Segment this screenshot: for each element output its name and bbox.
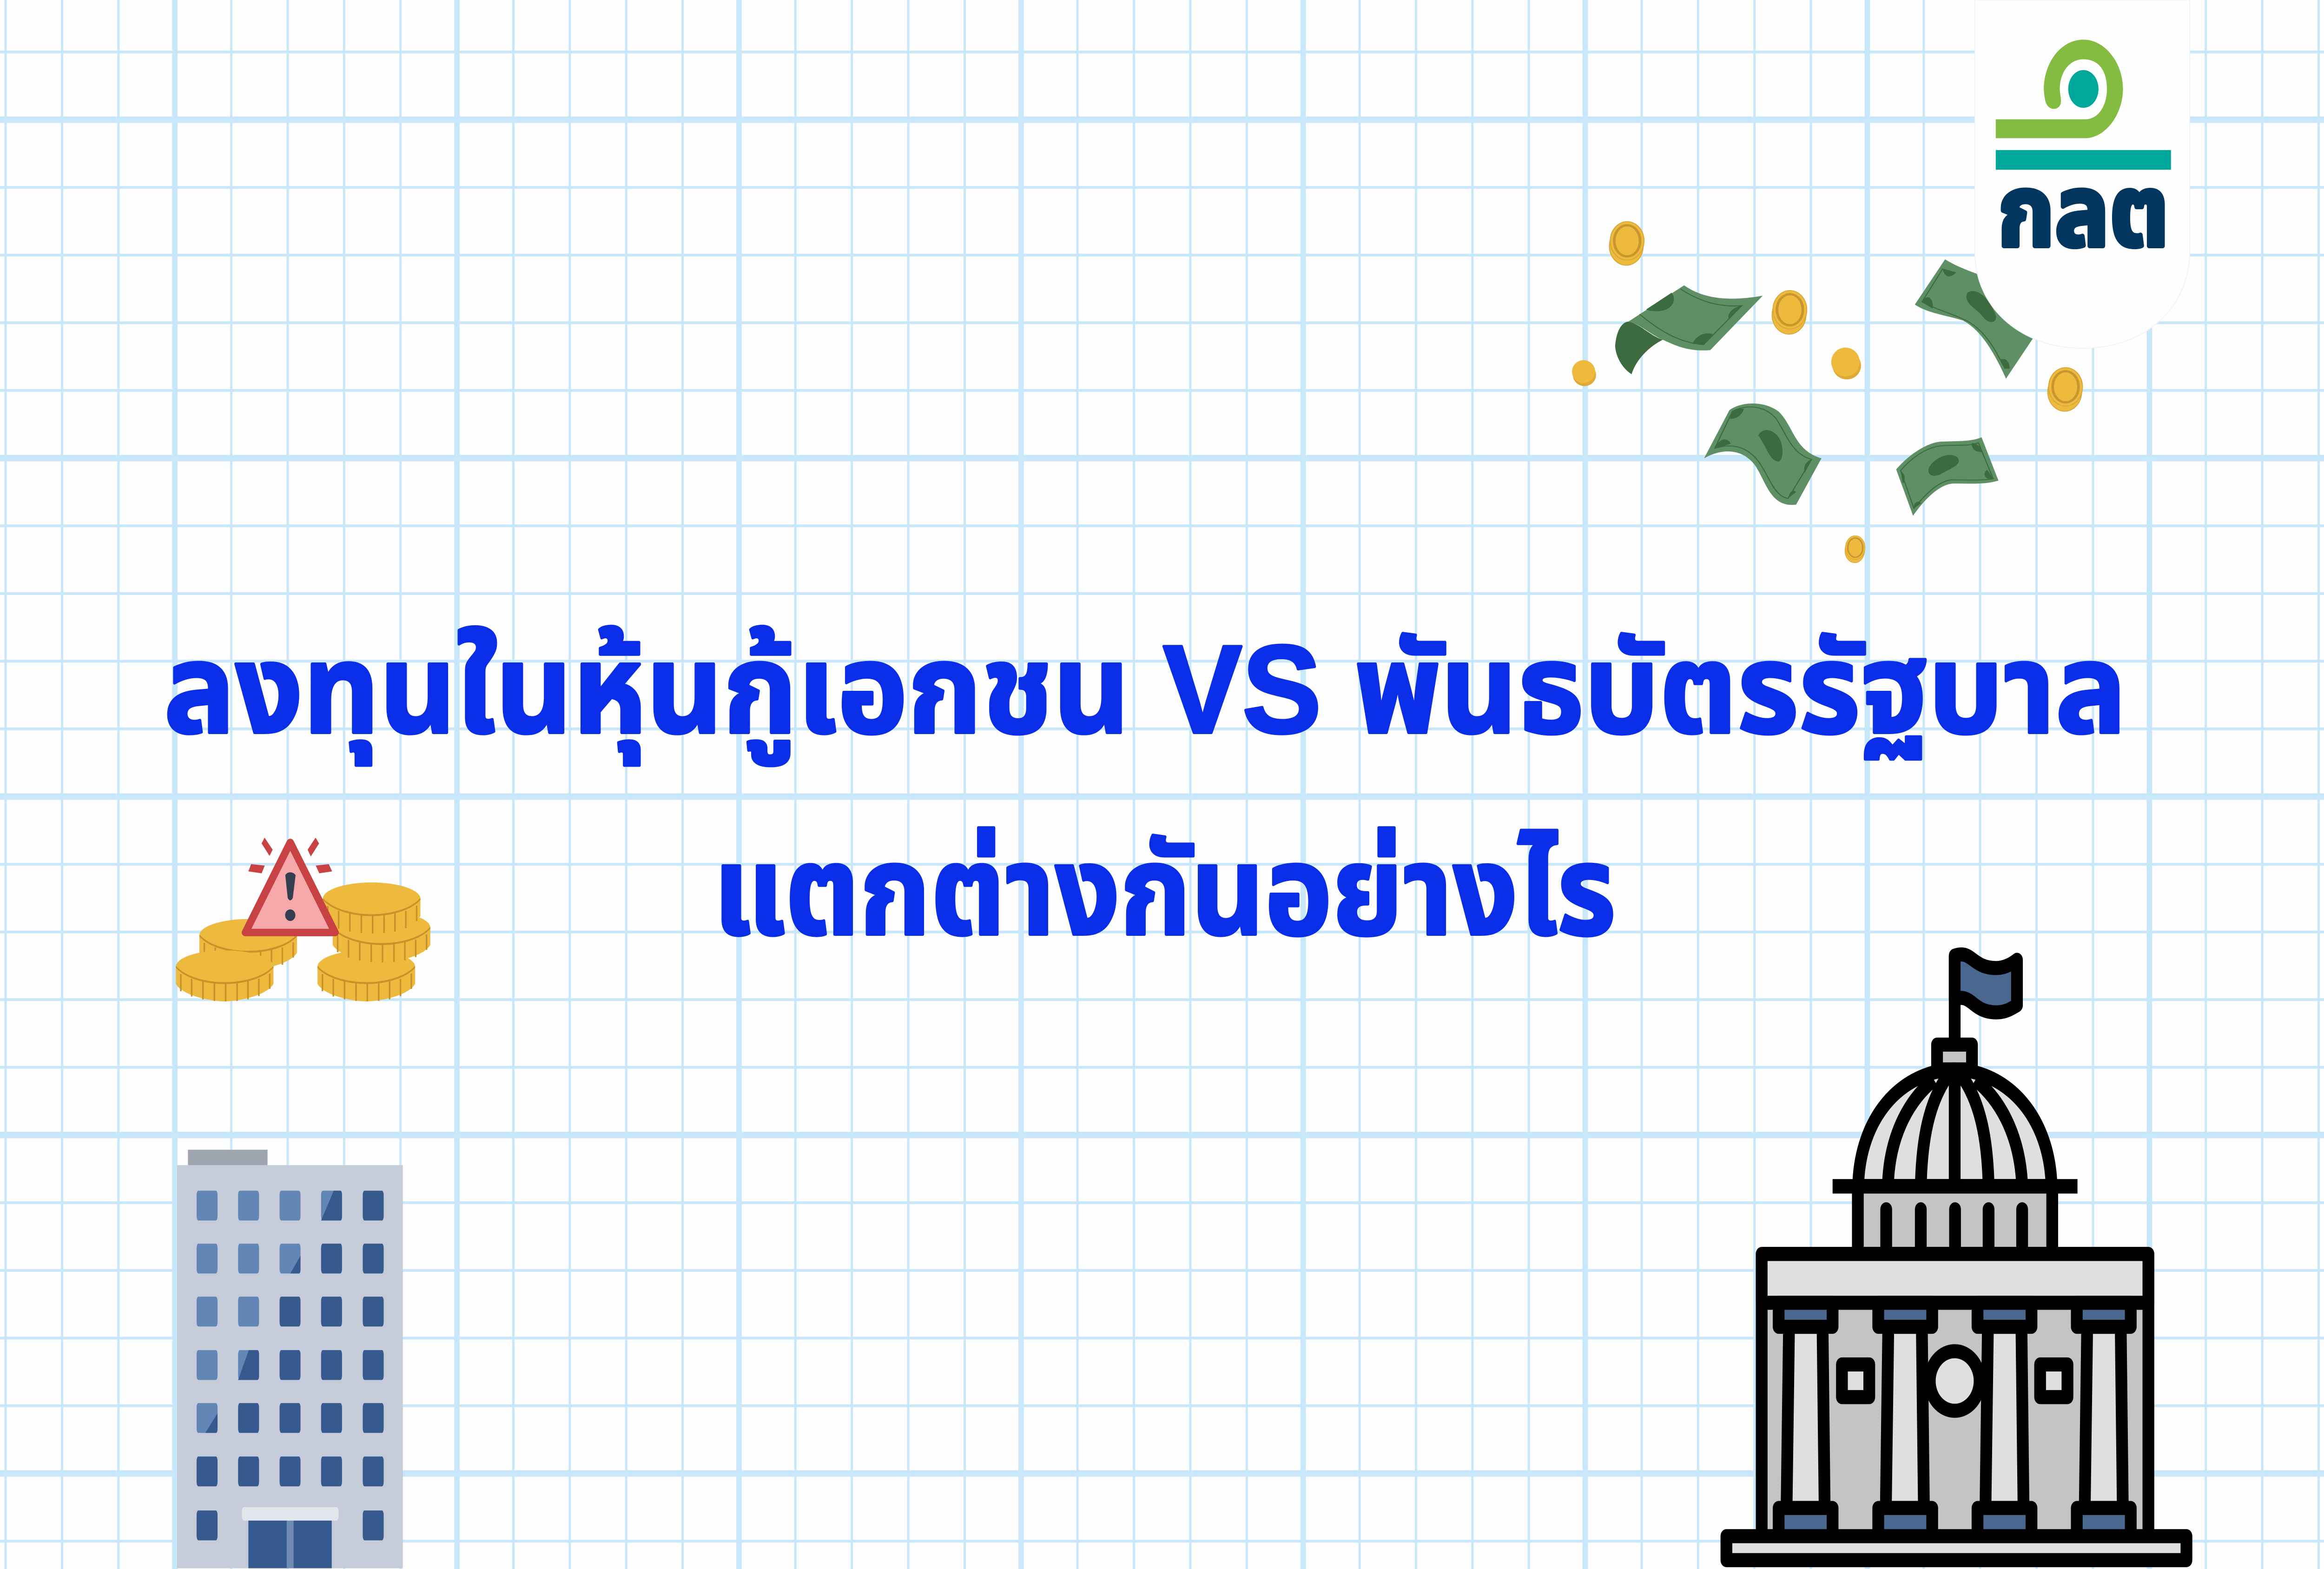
logo mark: teal bar <box>1996 150 2171 170</box>
building windows <box>197 1191 383 1540</box>
icon: banknote top right <box>1915 259 2036 379</box>
logo mark: green swirl <box>1996 40 2123 138</box>
warning triangle <box>245 838 335 933</box>
logo card: SEC Thailand <box>1975 0 2190 348</box>
icon: coin stacks with warning sign <box>176 838 430 1001</box>
building entrance <box>242 1507 339 1568</box>
logo wordmark: กลต <box>1998 156 2169 267</box>
coin stack right <box>317 882 430 1001</box>
icon: gold coins <box>1572 222 2082 563</box>
dome <box>1833 1045 2078 1254</box>
ground slab <box>1726 1536 2186 1560</box>
coin stack left <box>176 919 297 1001</box>
flag <box>1954 954 2017 1040</box>
icon: banknote bottom right <box>1896 437 1999 516</box>
main hall <box>1762 1254 2148 1537</box>
title line 2: แตกต่างกันอย่างไร <box>713 821 1616 961</box>
icon: corporate office building <box>177 1150 403 1568</box>
title <box>164 619 2126 961</box>
illustration: flying banknotes and gold coins <box>1572 222 2082 563</box>
icon: government building with dome and flag <box>1726 954 2186 1560</box>
icon: banknote middle <box>1704 404 1822 505</box>
logo mark: teal dot <box>2068 70 2099 108</box>
columns <box>1779 1303 2131 1537</box>
icon: banknote top left <box>1615 285 1763 374</box>
title line 1: ลงทุนในหุ้นกู้เอกชน VS พันธบัตรรัฐบาล <box>164 619 2126 766</box>
